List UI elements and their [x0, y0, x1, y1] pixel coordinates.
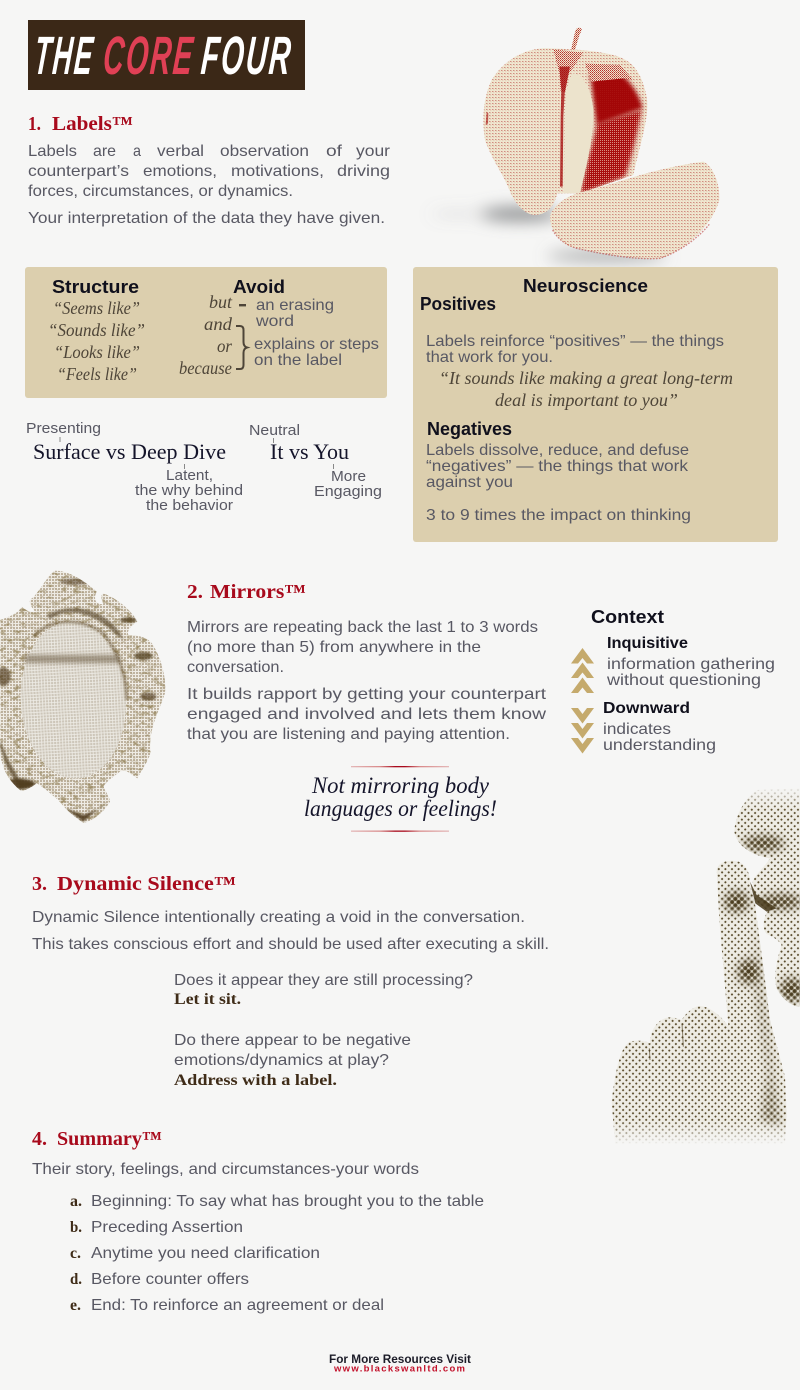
- text block: labels definition: of: [326, 143, 343, 160]
- face: [734, 788, 800, 1007]
- heading: 4. Summary: 4.: [32, 1128, 47, 1150]
- positives: deal is important to you”: [495, 390, 678, 410]
- text block: mirrors definition: conversation.: [187, 659, 284, 676]
- list: when to summarize: Preceding Assertion: [91, 1219, 243, 1236]
- text block: mirrors definition: (no more than 5) from anywhere in the: [187, 639, 481, 656]
- mirror frame shading: [0, 578, 156, 822]
- text block: silence guidance: Does it appear they are still processing?: [174, 972, 473, 989]
- mirror glass rim shading: [33, 622, 127, 700]
- diagram: surface vs deep dive: Latent,: [166, 467, 213, 484]
- dark halftone shading: [718, 829, 800, 1130]
- icon: down chevrons: [571, 708, 594, 754]
- diagram: surface vs deep dive: Presenting: [26, 420, 101, 437]
- list: when to summarize: a.: [70, 1193, 82, 1210]
- negatives: Labels dissolve, reduce, and defuse: [426, 442, 689, 459]
- apple flesh interior: [553, 49, 650, 197]
- mirror glass: [17, 619, 130, 781]
- column: structure: “Feels like”: [57, 364, 137, 384]
- apple stem: [571, 28, 582, 53]
- neuroscience heading: Neuroscience: [523, 276, 648, 296]
- list: when to summarize: d.: [70, 1271, 82, 1288]
- list: when to summarize: End: To reinforce an agreement or deal: [91, 1297, 384, 1314]
- column: avoid: word: [255, 313, 294, 330]
- text block: mirrors definition: It builds rapport by getting your counterpart: [187, 686, 547, 703]
- heading: 2. Mirrors: Mirrors™: [210, 581, 306, 603]
- positives: that work for you.: [426, 349, 553, 366]
- column: avoid: because: [179, 358, 232, 378]
- text block: labels definition: counterpart’s: [28, 163, 129, 180]
- footer: www.blackswanltd.com: [333, 1364, 465, 1374]
- text block: dynamic silence definition: This takes conscious effort and should be used after executing a skill.: [32, 936, 549, 953]
- footer: For More Resources Visit: [329, 1354, 471, 1366]
- diagram: it vs you: Engaging: [314, 483, 382, 500]
- icon: brace: [236, 326, 247, 369]
- diagram: surface vs deep dive: Surface vs Deep Dive: [33, 439, 226, 464]
- title banner: THE: [32, 26, 97, 86]
- column: avoid: an erasing: [256, 297, 334, 314]
- downward: Downward: [603, 700, 690, 717]
- negatives: Negatives: [427, 419, 512, 439]
- icon: up chevrons: [571, 648, 594, 693]
- bottom fade: [610, 1120, 790, 1145]
- downward: indicates: [603, 721, 671, 738]
- illustration: ornate halftone mirror: [0, 567, 170, 827]
- text block: mirrors definition: [187, 619, 547, 743]
- callout: not mirroring: [304, 766, 497, 832]
- text block: dynamic silence definition: [32, 909, 549, 953]
- inquisitive: without questioning: [606, 672, 761, 689]
- column: structure: Structure: [52, 277, 139, 297]
- apple core fan: [553, 49, 583, 92]
- text block: labels definition: motivations,: [231, 163, 324, 180]
- column: avoid: [179, 277, 379, 378]
- panel: structure and avoid: [25, 267, 387, 398]
- heading: 2. Mirrors: 2.: [187, 581, 203, 603]
- text block: silence guidance: [174, 972, 473, 1089]
- heading: 4. Summary: Summary™: [57, 1128, 162, 1150]
- negatives: “negatives” — the things that work: [426, 458, 689, 475]
- mirror frame: [0, 567, 170, 827]
- heading: 3. Dynamic Silence: Dynamic Silence™: [57, 873, 236, 895]
- text block: mirrors definition: that you are listening and paying attention.: [187, 726, 510, 743]
- knuckle creases: [649, 1023, 683, 1060]
- column: avoid: or: [217, 336, 233, 356]
- list: when to summarize: Anytime you need clarification: [91, 1245, 320, 1262]
- context heading: Context: [591, 607, 664, 627]
- positives: “It sounds like making a great long-term: [439, 368, 733, 388]
- text block: silence guidance: Do there appear to be negative: [174, 1032, 411, 1049]
- title banner: CORE: [101, 26, 197, 86]
- list: when to summarize: e.: [70, 1297, 81, 1314]
- finger and lip contact shadow: [750, 882, 777, 912]
- positives: [420, 294, 733, 410]
- text block: labels definition: [28, 143, 391, 227]
- column: avoid: but: [209, 292, 233, 312]
- apple cream seed cavity: [564, 73, 593, 193]
- text block: silence guidance: Let it sit.: [174, 991, 241, 1008]
- text block: silence guidance: Address with a label.: [174, 1072, 337, 1089]
- text block: labels definition: are: [93, 143, 116, 160]
- footer: [329, 1354, 471, 1374]
- text block: labels definition: Labels: [28, 143, 77, 160]
- diagram: surface vs deep dive: [26, 420, 243, 514]
- positives: Positives: [420, 294, 496, 314]
- column: structure: “Seems like”: [53, 298, 140, 318]
- column: structure: “Sounds like”: [48, 320, 145, 340]
- illustration: halftone finger to lips: [610, 787, 800, 1145]
- heading: 1. Labels: Labels™: [52, 113, 133, 135]
- diagram: surface vs deep dive: the why behind: [135, 482, 243, 499]
- hand: [612, 861, 787, 1143]
- positives: Labels reinforce “positives” — the things: [426, 333, 724, 350]
- text block: dynamic silence definition: Dynamic Silence intentionally creating a void in the conversation.: [32, 909, 525, 926]
- diagram: it vs you: More: [331, 468, 366, 485]
- apple shadow: [430, 207, 667, 261]
- text block: labels definition: emotions,: [143, 163, 217, 180]
- text block: silence guidance: emotions/dynamics at play?: [174, 1052, 389, 1069]
- text block: mirrors definition: engaged and involved and lets them know: [187, 706, 547, 723]
- diagram: surface vs deep dive: the behavior: [146, 497, 233, 514]
- text block: mirrors definition: Mirrors are repeating back the last 1 to 3 words: [187, 619, 538, 636]
- mirror reflection band: [25, 655, 120, 663]
- heading: 3. Dynamic Silence: 3.: [32, 873, 47, 895]
- text block: labels definition: driving: [337, 163, 390, 180]
- downward: [603, 700, 716, 754]
- negatives: against you: [426, 474, 513, 491]
- title banner: [28, 20, 305, 90]
- panel: neuroscience: [413, 267, 778, 542]
- text block: summary definition: Their story, feelings, and circumstances-your words: [32, 1161, 419, 1178]
- list: when to summarize: Beginning: To say what has brought you to the table: [91, 1193, 484, 1210]
- inquisitive: Inquisitive: [607, 635, 688, 652]
- inquisitive: information gathering: [607, 656, 775, 673]
- negatives: [426, 419, 691, 524]
- column: avoid: and: [204, 314, 233, 334]
- apple slice: [550, 162, 719, 259]
- column: structure: [48, 277, 145, 384]
- callout: not mirroring: Not mirroring body: [311, 773, 490, 798]
- text block: labels definition: verbal: [157, 143, 204, 160]
- list: when to summarize: b.: [70, 1219, 82, 1236]
- text block: labels definition: a: [133, 143, 141, 160]
- column: structure: “Looks like”: [54, 342, 140, 362]
- apple left shading: [486, 112, 488, 125]
- list: when to summarize: c.: [70, 1245, 81, 1262]
- column: avoid: Avoid: [233, 277, 285, 297]
- list: when to summarize: Before counter offers: [91, 1271, 249, 1288]
- list: when to summarize: [70, 1193, 484, 1314]
- inquisitive: [606, 635, 775, 689]
- text block: labels definition: forces, circumstances, or dynamics.: [28, 183, 293, 200]
- text block: labels definition: Your interpretation of the data they have given.: [28, 210, 385, 227]
- column: avoid: on the label: [254, 352, 342, 369]
- title banner: FOUR: [199, 26, 295, 86]
- diagram: it vs you: Neutral: [249, 422, 300, 439]
- apple core stalk: [559, 67, 570, 187]
- apple body: [483, 48, 647, 215]
- illustration: halftone sliced apple: [469, 28, 720, 267]
- diagram: it vs you: [249, 422, 382, 500]
- heading: 1. Labels: 1.: [28, 113, 41, 135]
- top fade: [727, 787, 800, 810]
- diagram: it vs you: It vs You: [270, 439, 349, 464]
- negatives: 3 to 9 times the impact on thinking: [426, 507, 691, 524]
- text block: labels definition: observation: [220, 143, 309, 160]
- callout: not mirroring: languages or feelings!: [304, 796, 497, 821]
- panel: mirror context: [571, 607, 775, 754]
- column: avoid: explains or steps: [254, 336, 379, 353]
- text block: labels definition: your: [356, 143, 391, 160]
- downward: understanding: [603, 737, 716, 754]
